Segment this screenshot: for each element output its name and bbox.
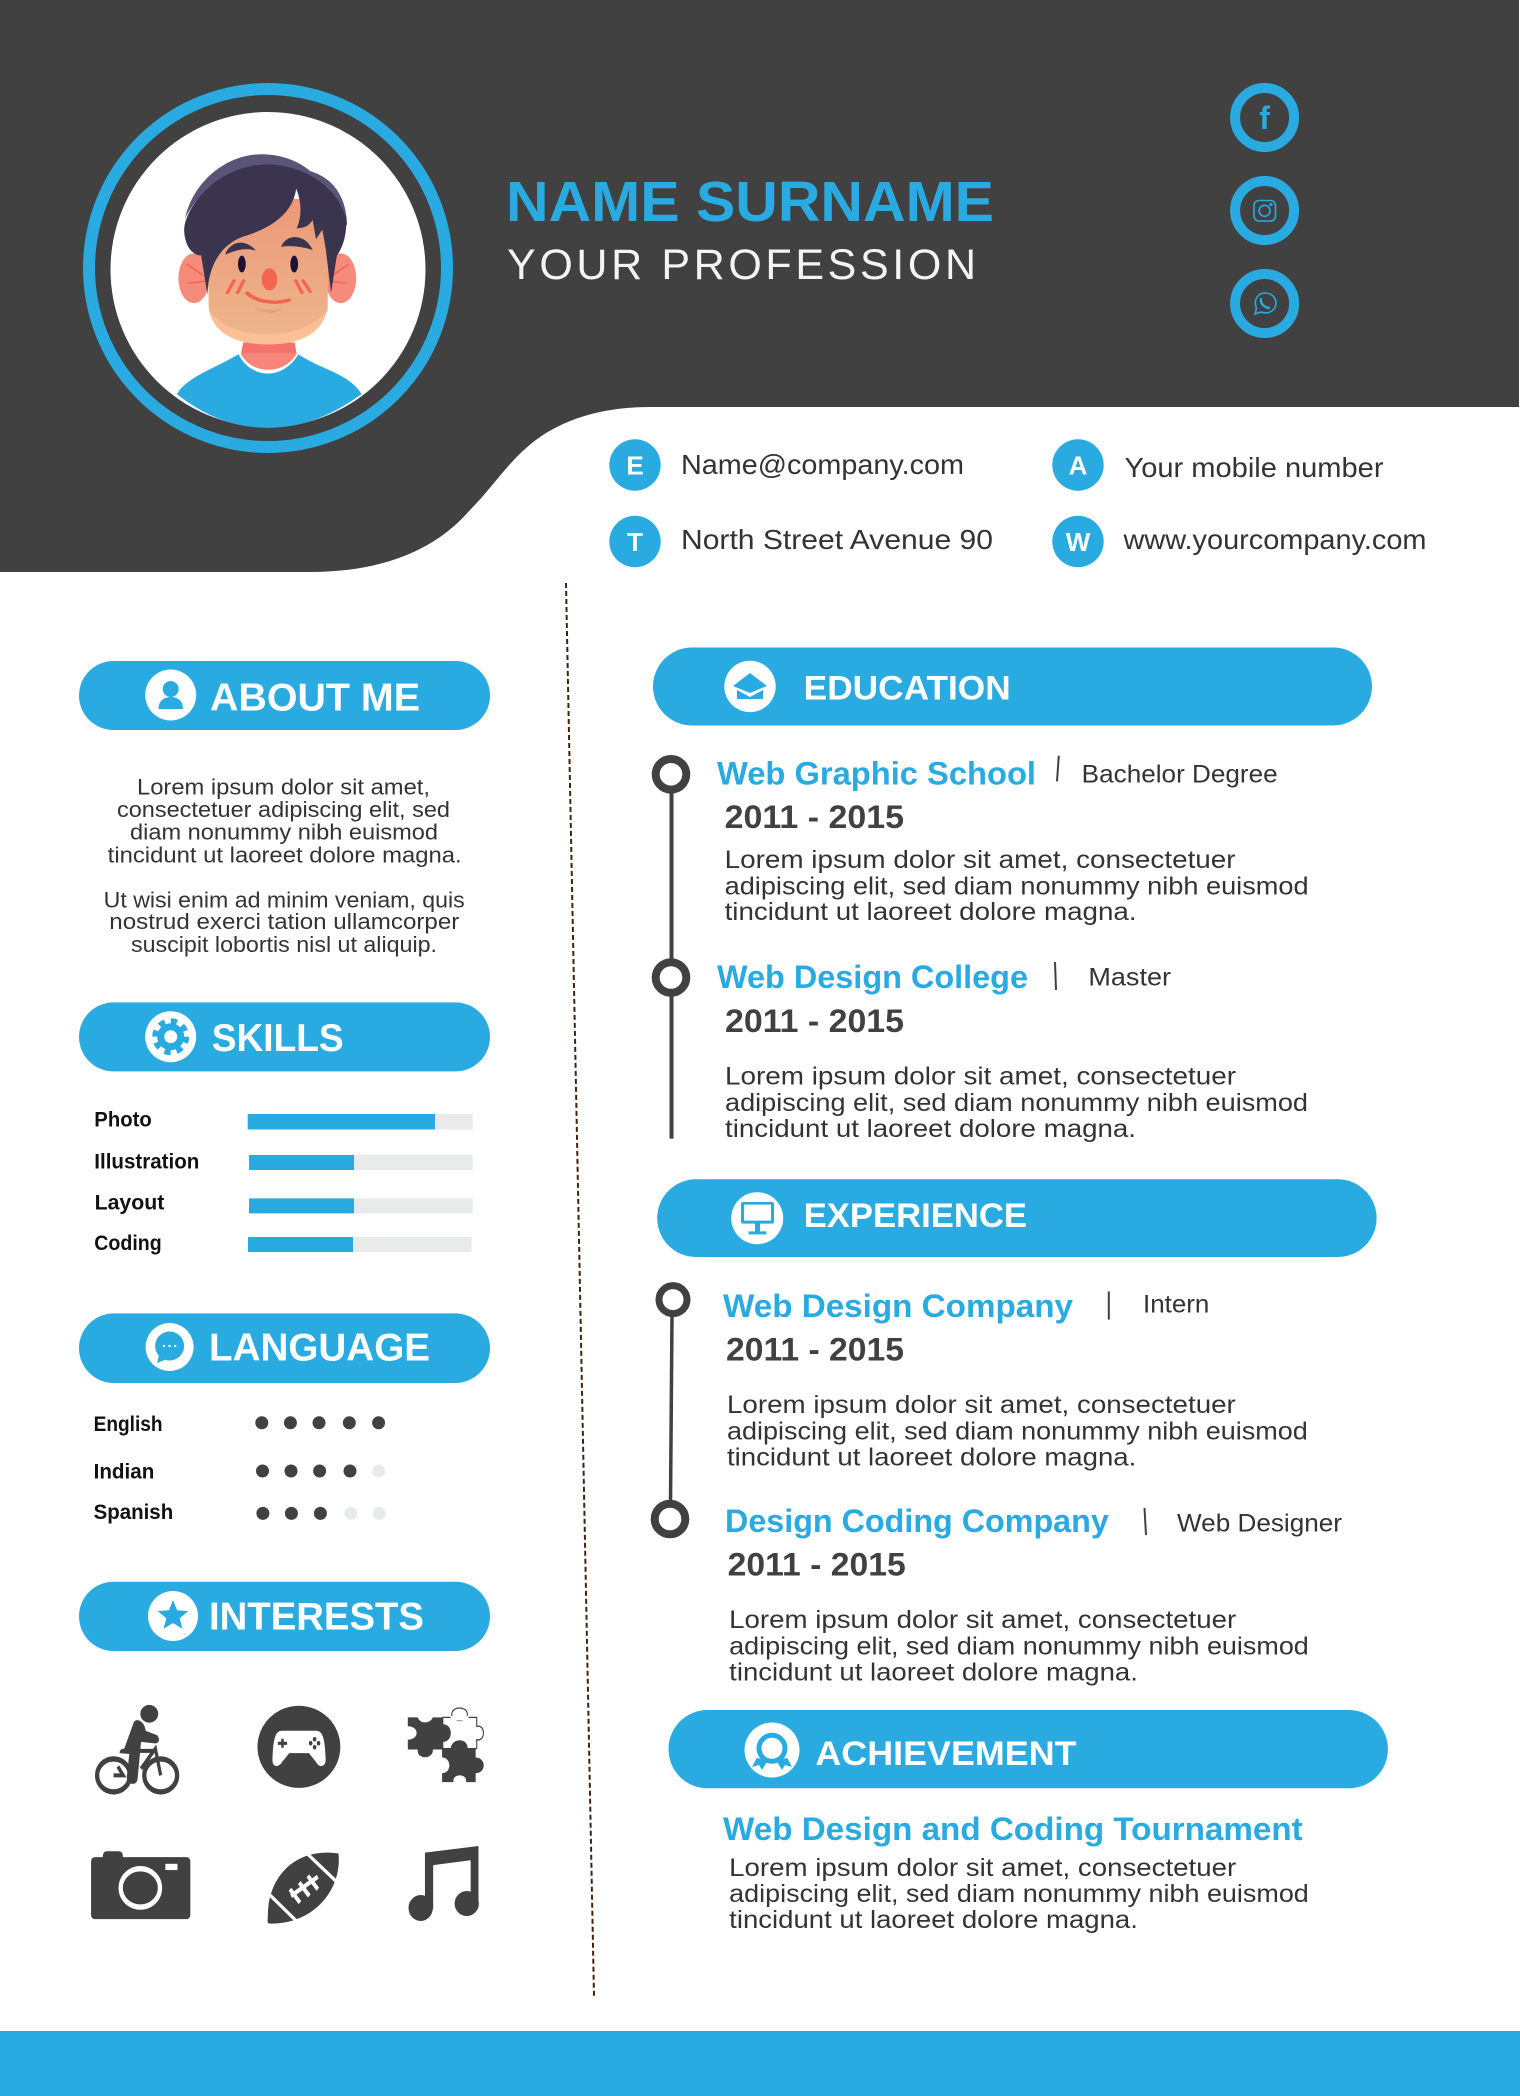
panel: about me	[79, 661, 490, 957]
about me heading	[79, 661, 490, 730]
language: english	[94, 1413, 385, 1436]
panel: education	[653, 648, 1372, 1143]
contact: website: W	[1066, 527, 1091, 557]
experience entry: design coding company	[725, 1503, 1342, 1686]
about me text: diam nonummy nibh euismod	[130, 820, 438, 845]
contact: email: E	[626, 450, 644, 480]
icon: music	[409, 1846, 479, 1921]
experience entry: web design company: tincidunt ut laoreet dolore magna.	[727, 1443, 1136, 1471]
achievement entry: Web Design and Coding Tournament	[723, 1811, 1303, 1847]
skill: photo	[94, 1108, 473, 1132]
about me heading: ABOUT ME	[210, 677, 420, 720]
education entry: web graphic school: Bachelor Degree	[1082, 760, 1278, 788]
achievement entry	[723, 1811, 1309, 1934]
contact: address: North Street Avenue 90	[681, 524, 993, 555]
education entry: web design college	[717, 959, 1308, 1143]
language heading: LANGUAGE	[209, 1326, 430, 1369]
language: english: English	[94, 1413, 163, 1436]
timeline	[655, 1286, 687, 1534]
icon: whatsapp	[1235, 274, 1294, 333]
education entry: web design college: tincidunt ut laoreet dolore magna.	[725, 1115, 1136, 1143]
achievement entry: adipiscing elit, sed diam nonummy nibh euismod	[729, 1880, 1309, 1908]
skill: coding	[94, 1232, 472, 1255]
panel: interests	[79, 1582, 490, 1924]
contact: website	[1052, 516, 1426, 567]
icon: gamepad	[257, 1706, 340, 1788]
contact: address	[609, 516, 993, 567]
contact: mobile	[1052, 439, 1384, 491]
about me text: Ut wisi enim ad minim veniam, quis	[104, 887, 465, 912]
achievement heading	[668, 1710, 1388, 1788]
experience entry: design coding company: Design Coding Company	[725, 1503, 1109, 1539]
about me text: consectetuer adipiscing elit, sed	[117, 797, 450, 822]
interests heading	[79, 1582, 490, 1651]
skill: layout	[95, 1191, 473, 1214]
skills heading	[79, 1002, 490, 1071]
icon: facebook: f	[1259, 100, 1270, 136]
experience entry: web design company: adipiscing elit, sed diam nonummy nibh euismod	[727, 1417, 1308, 1445]
language: indian: Indian	[94, 1461, 154, 1484]
interests heading: INTERESTS	[209, 1596, 424, 1638]
panel: skills	[79, 1002, 490, 1255]
icon: football	[268, 1853, 339, 1924]
experience entry: design coding company: Web Designer	[1177, 1509, 1342, 1537]
education entry: web design college: 2011 - 2015	[725, 1003, 904, 1039]
timeline	[656, 759, 686, 1139]
experience entry: web design company	[723, 1288, 1308, 1471]
education entry: web graphic school: adipiscing elit, sed diam nonummy nibh euismod	[725, 872, 1309, 900]
panel: experience	[655, 1179, 1377, 1686]
skills heading: SKILLS	[212, 1017, 344, 1060]
about me text	[104, 774, 465, 957]
contact: address: T	[627, 527, 643, 557]
achievement entry: tincidunt ut laoreet dolore magna.	[729, 1906, 1138, 1934]
skill: layout: Layout	[95, 1191, 164, 1214]
panel: language	[79, 1313, 490, 1524]
experience entry: design coding company: tincidunt ut laoreet dolore magna.	[729, 1658, 1138, 1686]
contact: mobile: A	[1069, 450, 1088, 480]
education entry: web design college: Web Design College	[717, 959, 1028, 995]
icon: puzzle	[408, 1708, 484, 1782]
subtitle: profession: YOUR PROFESSION	[507, 241, 976, 289]
education entry: web design college: Master	[1088, 963, 1171, 991]
education entry: web graphic school: Lorem ipsum dolor sit amet, consectetuer	[725, 846, 1236, 874]
experience entry: web design company: 2011 - 2015	[726, 1332, 904, 1368]
education entry: web graphic school	[717, 755, 1309, 926]
title: name: NAME SURNAME	[506, 170, 994, 234]
education entry: web graphic school: tincidunt ut laoreet dolore magna.	[725, 898, 1137, 926]
contact: email	[609, 439, 964, 491]
achievement entry: Lorem ipsum dolor sit amet, consectetuer	[729, 1854, 1236, 1882]
experience entry: design coding company: adipiscing elit, sed diam nonummy nibh euismod	[729, 1632, 1309, 1660]
about me text: tincidunt ut laoreet dolore magna.	[108, 842, 462, 867]
about me text: nostrud exerci tation ullamcorper	[109, 909, 459, 934]
education entry: web design college: Lorem ipsum dolor sit amet, consectetuer	[725, 1062, 1236, 1090]
panel: achievement	[668, 1710, 1388, 1934]
icon: instagram	[1235, 181, 1294, 240]
experience entry: web design company: Intern	[1143, 1290, 1209, 1318]
language: spanish	[94, 1501, 386, 1524]
about me text: suscipit lobortis nisl ut aliquip.	[131, 932, 437, 957]
skill: illustration	[94, 1151, 473, 1174]
profile portrait	[89, 89, 447, 447]
education heading	[653, 648, 1372, 726]
language: spanish: Spanish	[94, 1501, 173, 1524]
contact: email: Name@company.com	[681, 449, 964, 480]
about me text: Lorem ipsum dolor sit amet,	[137, 774, 430, 799]
skill: photo: Photo	[94, 1108, 152, 1132]
header background	[0, 0, 1519, 572]
icon: cyclist	[97, 1705, 177, 1792]
skill: coding: Coding	[94, 1232, 162, 1255]
language heading	[79, 1313, 490, 1383]
icon: camera	[91, 1851, 190, 1919]
education entry: web design college: adipiscing elit, sed diam nonummy nibh euismod	[725, 1089, 1308, 1117]
education heading: EDUCATION	[804, 669, 1011, 707]
experience heading	[657, 1179, 1377, 1257]
achievement heading: ACHIEVEMENT	[815, 1735, 1077, 1773]
language: indian	[94, 1461, 385, 1484]
experience entry: web design company: Lorem ipsum dolor sit amet, consectetuer	[727, 1391, 1236, 1419]
skill: illustration: Illustration	[94, 1151, 199, 1174]
experience heading: EXPERIENCE	[804, 1197, 1027, 1235]
experience entry: web design company: Web Design Company	[723, 1288, 1073, 1324]
footer bar	[0, 2031, 1520, 2096]
education entry: web graphic school: Web Graphic School	[717, 755, 1036, 791]
contact: website: www.yourcompany.com	[1122, 524, 1426, 555]
experience entry: design coding company: 2011 - 2015	[728, 1546, 906, 1582]
education entry: web graphic school: 2011 - 2015	[725, 799, 904, 835]
contact: mobile: Your mobile number	[1124, 452, 1384, 483]
icon: facebook	[1235, 88, 1294, 147]
experience entry: design coding company: Lorem ipsum dolor sit amet, consectetuer	[729, 1606, 1236, 1634]
